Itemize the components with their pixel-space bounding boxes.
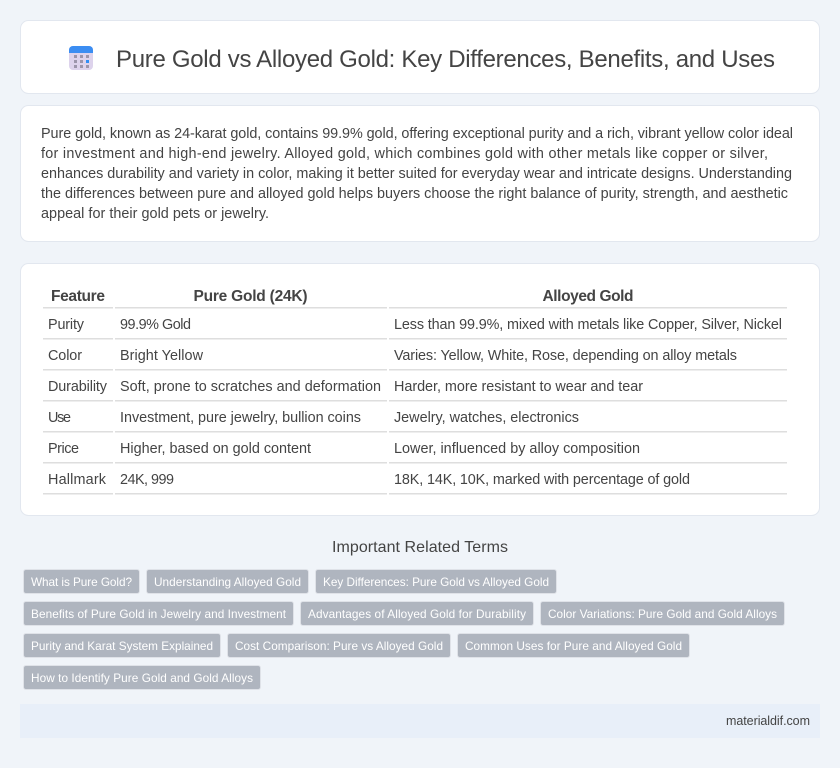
header panel	[20, 20, 820, 94]
panel: intro paragraph: Pure gold, known as 24-karat gold, contains 99.9% gold, offering exceptional purity and a rich, vibrant yellow color ideal	[41, 126, 793, 142]
row: hallmark: 18K, 14K, 10K, marked with percentage of gold	[394, 472, 690, 488]
related terms tags: Understanding Alloyed Gold	[154, 575, 301, 589]
row: durability: Durability	[48, 379, 108, 395]
related terms tags: Purity and Karat System Explained	[31, 639, 213, 653]
row: purity: Less than 99.9%, mixed with metals like Copper, Silver, Nickel	[394, 317, 782, 333]
row: durability: Harder, more resistant to wear and tear	[394, 379, 643, 395]
row: color: Varies: Yellow, White, Rose, depending on alloy metals	[394, 348, 737, 364]
related terms tags: What is Pure Gold?	[31, 575, 132, 589]
table header: Alloyed Gold	[542, 288, 634, 305]
footer: materialdif.com	[726, 714, 810, 728]
related terms tags: Common Uses for Pure and Alloyed Gold	[465, 639, 682, 653]
row: color	[48, 348, 737, 364]
row: price: Lower, influenced by alloy composition	[394, 441, 640, 457]
icon: calendar grid	[69, 46, 93, 70]
panel: intro paragraph: appeal for their gold pets or jewelry.	[41, 206, 269, 222]
related terms tags: Color Variations: Pure Gold and Gold Alloys	[548, 607, 777, 621]
row: price: Price	[48, 441, 79, 457]
related terms tags: Cost Comparison: Pure vs Alloyed Gold	[235, 639, 443, 653]
row: hallmark: Hallmark	[48, 472, 107, 488]
row: purity: 99.9% Gold	[120, 317, 191, 333]
row: durability	[48, 379, 643, 395]
heading: related terms: Important Related Terms	[332, 539, 508, 556]
panel: intro paragraph: for investment and high-end jewelry. Alloyed gold, which combines gold with other metals like copper or silver,	[41, 146, 768, 162]
row: hallmark	[48, 472, 690, 488]
row: color: Color	[48, 348, 82, 364]
row: use: Jewelry, watches, electronics	[394, 410, 579, 426]
footer	[20, 704, 820, 738]
related terms tags	[24, 570, 784, 690]
table header: Feature	[51, 288, 105, 305]
row: use: Investment, pure jewelry, bullion coins	[120, 410, 361, 426]
related terms tags: How to Identify Pure Gold and Gold Alloys	[31, 671, 253, 685]
panel: intro paragraph: the differences between pure and alloyed gold helps buyers choose the right balance of purity, strength, and aesthetic	[41, 186, 788, 202]
row: price: Higher, based on gold content	[120, 441, 311, 457]
panel: comparison table	[20, 264, 820, 516]
related terms tags: Key Differences: Pure Gold vs Alloyed Gold	[323, 575, 549, 589]
row: hallmark: 24K, 999	[120, 472, 174, 488]
row: purity	[48, 317, 782, 333]
related terms tags: Benefits of Pure Gold in Jewelry and Investment	[31, 607, 287, 621]
panel: intro paragraph: enhances durability and variety in color, making it better suited for everyday wear and intricate designs. Understanding	[41, 166, 792, 182]
row: color: Bright Yellow	[120, 348, 204, 364]
row: price	[48, 441, 640, 457]
panel: intro paragraph	[20, 106, 820, 242]
row: durability: Soft, prone to scratches and deformation	[120, 379, 381, 395]
table header: Pure Gold (24K)	[194, 288, 308, 305]
row: use	[48, 410, 579, 426]
table header	[51, 288, 634, 305]
title: Pure Gold vs Alloyed Gold: Key Differences, Benefits, and Uses	[116, 46, 775, 73]
row: use: Use	[48, 410, 71, 426]
row: purity: Purity	[48, 317, 85, 333]
related terms tags: Advantages of Alloyed Gold for Durability	[308, 607, 526, 621]
